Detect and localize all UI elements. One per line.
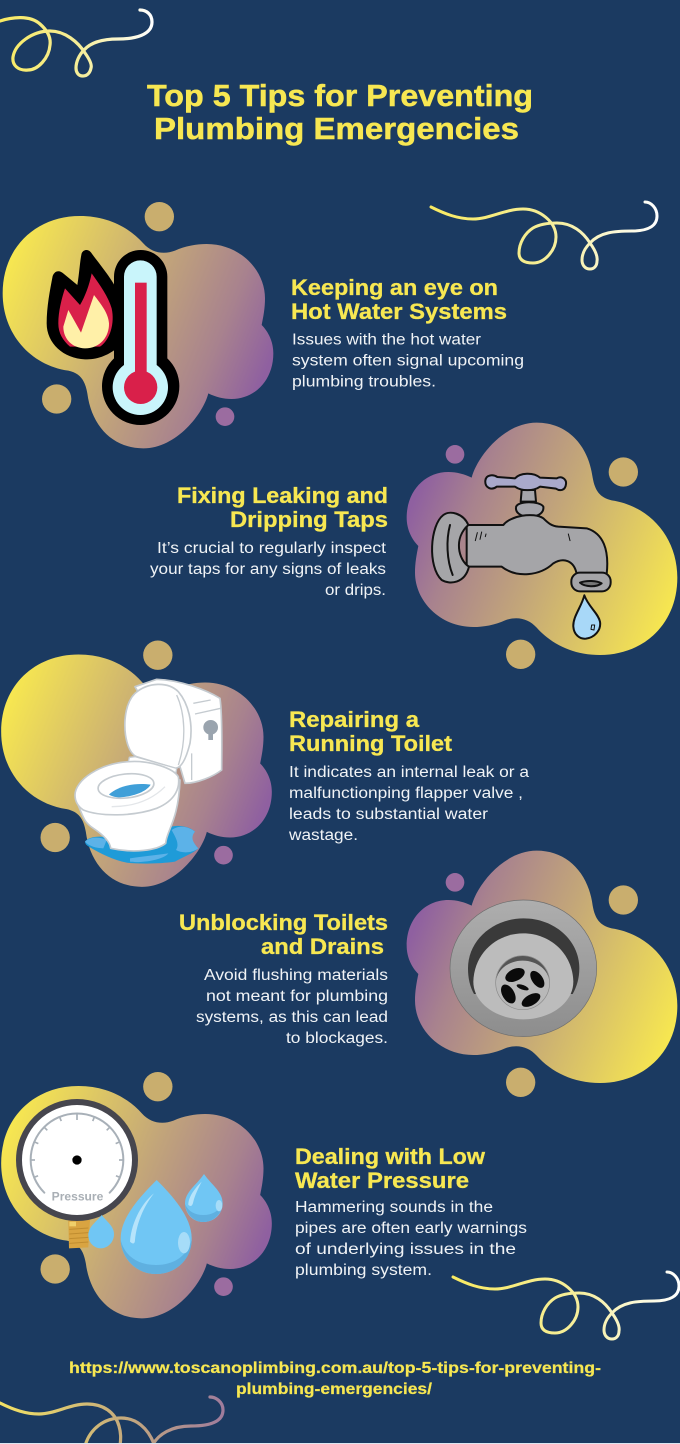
text: tip 5: Dealing with Low (295, 1144, 486, 1169)
title: Plumbing Emergencies (154, 111, 519, 146)
icon: thermometer (102, 250, 179, 425)
panel: blocked drain illustration (407, 851, 677, 1097)
text: tip 2: It’s crucial to regularly inspect (157, 540, 387, 557)
blob background (1, 654, 272, 887)
text: tip 3: wastage. (288, 827, 358, 844)
icon: pressure gauge: Pressure (52, 1190, 104, 1204)
blob background (407, 851, 677, 1083)
text: tip 4 (179, 910, 388, 1047)
text: tip 2: Dripping Taps (230, 507, 388, 532)
text: tip 3: Repairing a (289, 707, 420, 732)
text: tip 5: plumbing system. (295, 1262, 432, 1279)
text: tip 4: not meant for plumbing (206, 988, 388, 1005)
icon: pressure gauge (19, 1102, 135, 1248)
footer url: plumbing-emergencies/ (236, 1381, 433, 1398)
text: tip 1: Keeping an eye on (291, 275, 498, 300)
text: tip 5 (295, 1144, 527, 1279)
text: tip 3: leads to substantial water (289, 806, 488, 823)
decorative squiggle: bottom left (0, 1397, 223, 1444)
text: tip 4: Avoid flushing materials (204, 967, 388, 984)
title: Top 5 Tips for Preventing (147, 78, 533, 113)
text: tip 3: It indicates an internal leak or a (289, 764, 529, 781)
blob background (3, 216, 273, 448)
text: tip 4: systems, as this can lead (196, 1009, 388, 1026)
icon: water drops (88, 1174, 223, 1274)
text: tip 3: malfunctionping flapper valve , (289, 785, 523, 802)
decorative squiggle: lower right (453, 1272, 679, 1339)
panel: hot water illustration (3, 202, 273, 448)
icon: drain (450, 900, 597, 1037)
panel: low water pressure illustration (1, 1072, 272, 1318)
text: tip 1: plumbing troubles. (292, 374, 436, 390)
text: tip 2 (150, 483, 388, 599)
blob background (1, 1086, 272, 1318)
blob background (407, 423, 677, 655)
text: tip 1: Hot Water Systems (291, 299, 507, 324)
text: tip 5: pipes are often early warnings (295, 1220, 527, 1237)
panel: running toilet illustration (1, 640, 272, 887)
text: tip 4: Unblocking Toilets (179, 910, 388, 935)
icon: flame (47, 250, 118, 359)
text: tip 1: Issues with the hot water (292, 332, 481, 348)
text: tip 2: or drips. (325, 582, 386, 599)
text: tip 2: Fixing Leaking and (177, 483, 388, 508)
text: tip 5: Water Pressure (295, 1168, 469, 1193)
icon: toilet (75, 679, 222, 864)
text: tip 5: Hammering sounds in the (295, 1199, 493, 1216)
panel: leaking tap illustration (407, 423, 677, 669)
text: tip 4: to blockages. (286, 1030, 388, 1047)
text: tip 1: system often signal upcoming (292, 352, 524, 370)
decorative squiggle: top left (0, 10, 152, 76)
text: tip 1 (291, 275, 524, 390)
text: tip 3: Running Toilet (289, 731, 453, 756)
text: tip 2: your taps for any signs of leaks (150, 561, 386, 578)
text: tip 5: of underlying issues in the (295, 1241, 516, 1258)
text: tip 3 (288, 707, 529, 844)
title (147, 78, 533, 146)
decorative squiggle: upper right (431, 202, 657, 269)
text: tip 4: and Drains (261, 934, 384, 959)
icon: tap (432, 474, 611, 639)
footer url (69, 1360, 601, 1398)
footer url: https://www.toscanoplimbing.com.au/top-5-tips-for-preventing- (69, 1360, 601, 1377)
